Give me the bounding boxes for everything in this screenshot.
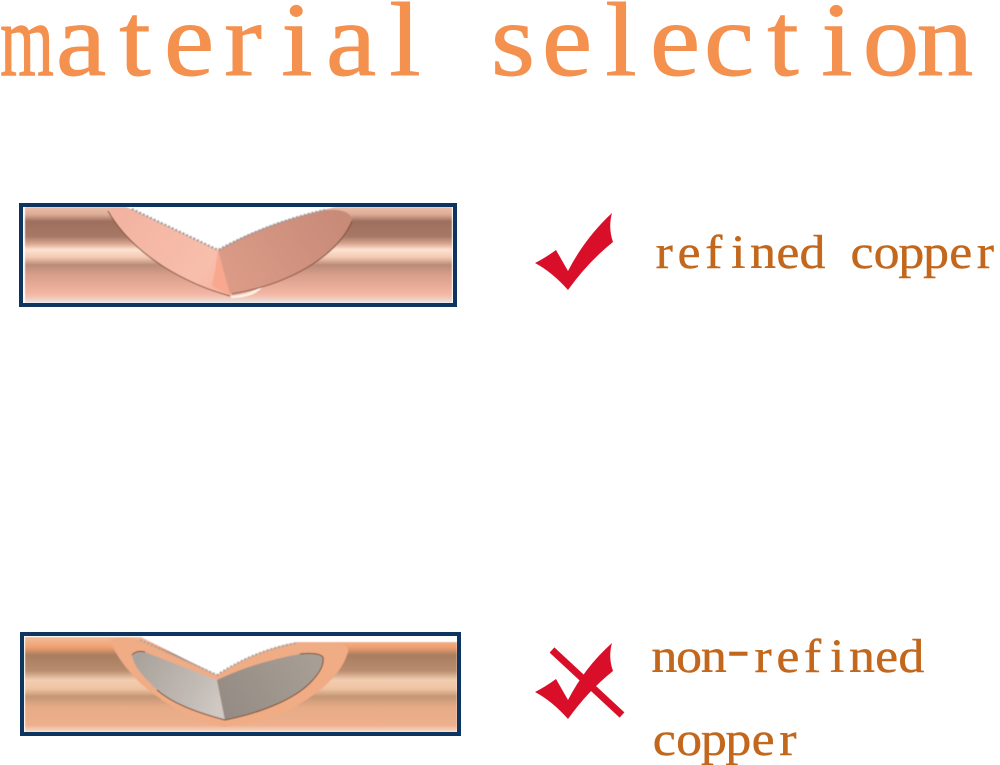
tube imagery xyxy=(25,634,458,732)
panel: refined copper tube xyxy=(21,205,455,305)
label: refined copper: refined copper xyxy=(656,225,994,279)
first line: non xyxy=(651,629,727,683)
serrated blade edge xyxy=(132,209,325,250)
tube notch and top strip cut-out xyxy=(135,634,458,675)
second line: copper xyxy=(653,712,797,765)
grey right face xyxy=(217,653,323,720)
right petal of cut xyxy=(218,210,352,294)
seam highlight xyxy=(212,250,230,295)
grey steel core xyxy=(132,651,323,720)
first line: refined xyxy=(754,629,924,683)
panel: non-refined copper tube xyxy=(22,634,459,734)
tube imagery xyxy=(25,205,452,303)
icon: red check mark xyxy=(535,213,613,290)
petal shadow edges xyxy=(108,211,352,296)
copper rim of cut xyxy=(110,638,348,727)
serrated blade edge xyxy=(140,640,297,675)
icon: red check mark crossed out xyxy=(535,643,622,719)
bright sliver below right petal xyxy=(231,285,264,298)
left petal of cut xyxy=(107,208,230,295)
cross stroke xyxy=(552,650,622,715)
tube body xyxy=(25,207,452,303)
first line: - xyxy=(727,622,750,676)
navy frame xyxy=(22,634,459,734)
label: non-refined copper xyxy=(651,622,924,765)
grey left face xyxy=(132,651,225,720)
core dark outline xyxy=(132,651,323,720)
tube body xyxy=(25,637,457,732)
navy frame xyxy=(21,205,455,305)
check shape xyxy=(535,643,613,719)
tube notch cut-out xyxy=(122,205,345,250)
